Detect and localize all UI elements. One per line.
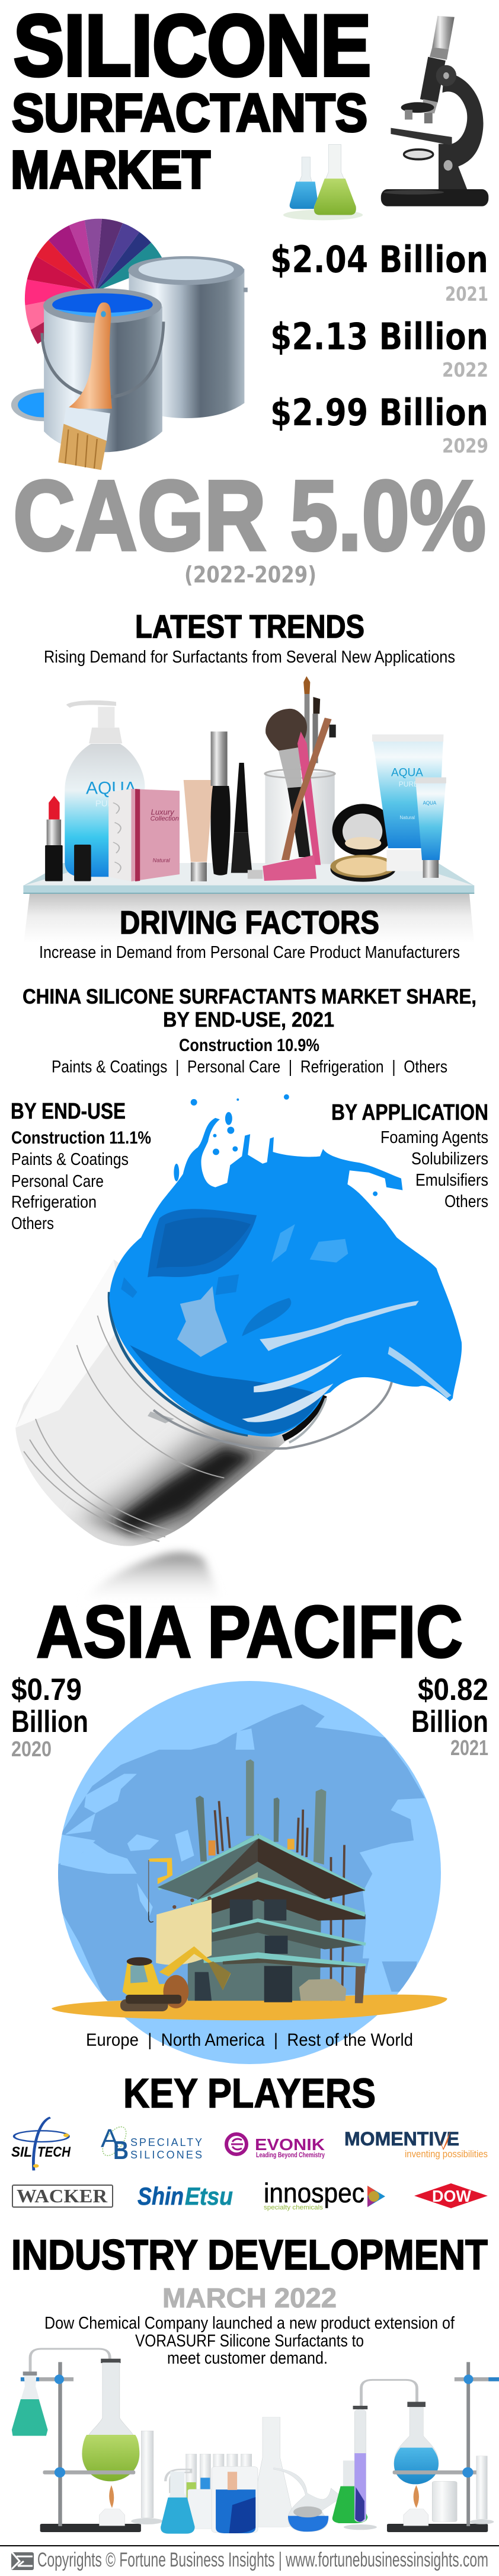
china market share block: Construction 10.9%	[179, 1036, 319, 1055]
by end-use list: Refrigeration	[11, 1193, 97, 1212]
other regions: Europe | North America | Rest of the World	[86, 2030, 413, 2050]
illustration: laboratory glassware	[12, 2349, 499, 2534]
asia pacific 2020 value: 2020	[11, 1737, 52, 1761]
illustration: cosmetics on glass shelf: PURE	[399, 780, 418, 788]
illustration: cosmetics on glass shelf: AQUA	[391, 766, 423, 779]
by end-use list: Paints & Coatings	[11, 1150, 129, 1169]
logo: Momentive: MOMENTIVE	[344, 2128, 459, 2150]
china market share block	[23, 985, 476, 1077]
development description	[44, 2314, 455, 2368]
illustration: cosmetics on glass shelf: Luxury	[151, 807, 175, 816]
logo: AB Specialty Silicones	[98, 2123, 202, 2165]
icon: microscope	[381, 16, 488, 206]
illustration: cosmetics on glass shelf: Collection	[151, 815, 179, 822]
asia pacific 2021 value: $0.82	[418, 1673, 488, 1707]
logo: Momentive: inventing possibilities	[405, 2148, 488, 2160]
title: SURFACTANTS	[12, 84, 367, 143]
key players heading: KEY PLAYERS	[123, 2070, 376, 2116]
asia pacific 2020 value: $0.79	[11, 1673, 82, 1707]
market size figures	[270, 238, 488, 457]
illustration: cosmetics on glass shelf: PUR	[95, 798, 114, 808]
asia pacific 2020 value	[11, 1673, 88, 1761]
market size figures: 2029	[442, 434, 488, 457]
illustration: cosmetics on glass shelf: Natural	[153, 857, 171, 863]
icon: flasks	[283, 145, 363, 220]
logo: Momentive	[344, 2128, 488, 2160]
logo: AB Specialty Silicones: A	[101, 2124, 119, 2153]
china market share block: BY END-USE, 2021	[163, 1008, 334, 1031]
logo: Evonik: EVONIK	[255, 2135, 325, 2154]
asia pacific 2021 value: 2021	[450, 1736, 488, 1760]
by application list: Solubilizers	[411, 1150, 488, 1168]
driving factors heading: DRIVING FACTORS	[120, 904, 379, 941]
by application list: Others	[444, 1192, 488, 1211]
logo: AB Specialty Silicones: SPECIALTY	[130, 2136, 202, 2148]
market size figures: 2022	[442, 358, 488, 381]
latest trends heading	[44, 608, 455, 667]
logo: Evonik	[226, 2134, 325, 2159]
logo: Dow	[414, 2183, 488, 2208]
development date: MARCH 2022	[162, 2282, 337, 2313]
development description: meet customer demand.	[167, 2349, 328, 2368]
by application list	[331, 1100, 488, 1211]
logo: Wacker: WACKER	[17, 2185, 108, 2206]
illustration: cosmetics on glass shelf: Natural	[399, 815, 415, 820]
logo: Innospec: specialty chemicals	[264, 2204, 324, 2211]
illustration: globe with building under construction	[52, 1681, 447, 2064]
by end-use list: Construction 11.1%	[11, 1128, 151, 1148]
logo: Evonik: Leading Beyond Chemistry	[256, 2151, 325, 2159]
logo: Siltech: TECH	[37, 2144, 71, 2160]
by application list: Emulsifiers	[415, 1171, 488, 1190]
logo: Shin-Etsu: Shin	[137, 2182, 184, 2210]
illustration: cosmetics on glass shelf	[23, 676, 474, 943]
illustration: cosmetics on glass shelf: AQUA	[423, 801, 437, 806]
by end-use list	[11, 1099, 151, 1233]
logo: Siltech: SIL	[11, 2144, 32, 2160]
by end-use list: Others	[11, 1214, 54, 1233]
logo: Shin-Etsu: Etsu	[185, 2182, 233, 2210]
CAGR headline: (2022-2029)	[184, 562, 316, 588]
asia pacific 2020 value: Billion	[11, 1705, 88, 1739]
logo: Shin-Etsu	[137, 2182, 233, 2210]
logo: Innospec: innospec	[264, 2177, 364, 2208]
logo: Dow: DOW	[432, 2187, 472, 2205]
title	[11, 0, 371, 200]
by end-use list: BY END-USE	[11, 1099, 126, 1124]
logo: AB Specialty Silicones: SILICONES	[130, 2149, 202, 2161]
latest trends heading: LATEST TRENDS	[135, 608, 364, 645]
by end-use list: Personal Care	[11, 1172, 104, 1191]
market size figures: 2021	[445, 282, 488, 305]
illustration: tilted paint can with blue splash	[15, 1094, 462, 1604]
logo: Siltech	[11, 2118, 71, 2170]
development description: VORASURF Silicone Surfactants to	[135, 2332, 364, 2351]
title: MARKET	[11, 141, 210, 200]
driving factors heading	[39, 904, 460, 962]
asia pacific 2021 value	[411, 1673, 488, 1760]
logo: AB Specialty Silicones: B	[113, 2136, 129, 2165]
illustration: paint cans and colour fan	[11, 212, 248, 470]
illustration: cosmetics on glass shelf: AQUA	[86, 778, 136, 798]
